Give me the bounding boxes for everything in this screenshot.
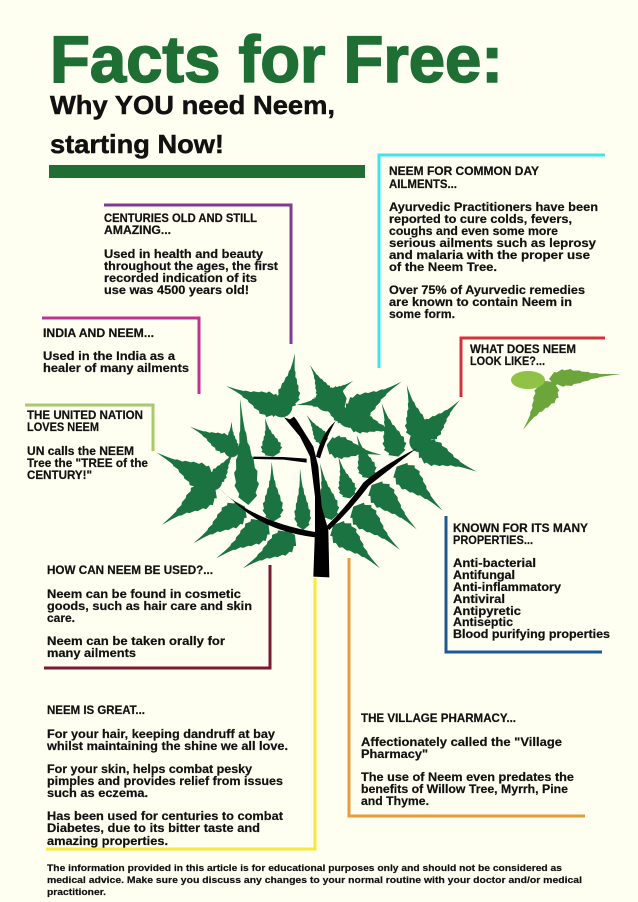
panel: India and Neem: INDIA AND NEEM... xyxy=(43,328,154,340)
panel: common day ailments xyxy=(379,155,605,368)
panel: how can neem be used: Neem can be taken orally for xyxy=(47,636,226,648)
subtitle xyxy=(50,90,335,159)
panel: centuries old: CENTURIES OLD AND STILL xyxy=(104,213,257,225)
panel: common day ailments: and malaria with the proper use xyxy=(389,250,590,262)
panel: known properties: Antiseptic xyxy=(453,617,514,629)
panel: neem is great: Diabetes, due to its bitter taste and xyxy=(47,823,260,835)
panel: how can neem be used: many ailments xyxy=(47,648,136,660)
panel: India and Neem: Used in the India as a xyxy=(43,351,176,363)
panel: neem is great: For your skin, helps combat pesky xyxy=(47,764,253,776)
panel: known properties: Blood purifying properties xyxy=(453,629,610,641)
panel: centuries old: Used in health and beauty xyxy=(104,249,264,261)
panel: known properties: Anti-inflammatory xyxy=(453,582,562,594)
panel: common day ailments: NEEM FOR COMMON DAY xyxy=(389,166,539,178)
panel: centuries old: use was 4500 years old! xyxy=(104,285,249,297)
panel: common day ailments: AILMENTS... xyxy=(389,179,457,191)
panel: known properties: PROPERTIES... xyxy=(453,535,533,547)
panel: how can neem be used: care. xyxy=(47,613,75,625)
panel: how can neem be used: HOW CAN NEEM BE USED?... xyxy=(47,565,213,577)
panel: United Nation: UN calls the NEEM xyxy=(27,446,134,458)
panel: known properties: Anti-bacterial xyxy=(453,558,536,570)
panel: common day ailments: Over 75% of Ayurvedic remedies xyxy=(389,285,585,297)
panel: village pharmacy: benefits of Willow Tree, Myrrh, Pine xyxy=(361,784,568,796)
panel: common day ailments: are known to contain Neem in xyxy=(389,297,572,309)
panel: village pharmacy: The use of Neem even predates the xyxy=(361,772,574,784)
panel: how can neem be used: Neem can be found in cosmetic xyxy=(47,589,242,601)
disclaimer: The information provided in this article is for educational purposes only and should not be considered as xyxy=(47,863,562,874)
panel: known properties: Antiviral xyxy=(453,594,505,606)
panel: village pharmacy: Pharmacy" xyxy=(361,749,428,761)
panel: neem is great: such as eczema. xyxy=(47,788,148,800)
panel: what does neem look like: WHAT DOES NEEM xyxy=(470,344,576,356)
subtitle: Why YOU need Neem, xyxy=(50,90,335,120)
panel: known properties: Antifungal xyxy=(453,570,515,582)
panel: how can neem be used: goods, such as hair care and skin xyxy=(47,601,252,613)
panel: village pharmacy: and Thyme. xyxy=(361,796,429,808)
panel: neem is great: amazing properties. xyxy=(47,836,168,848)
panel: centuries old: AMAZING... xyxy=(104,225,171,237)
panel: common day ailments: some form. xyxy=(389,309,455,321)
panel: village pharmacy: Affectionately called the "Village xyxy=(361,737,562,749)
disclaimer: practitioner. xyxy=(47,887,106,898)
panel: common day ailments: coughs and even some more xyxy=(389,226,558,238)
panel: common day ailments: reported to cure colds, fevers, xyxy=(389,214,572,226)
disclaimer xyxy=(47,863,582,898)
panel: United Nation: CENTURY!" xyxy=(27,470,92,482)
panel: India and Neem: healer of many ailments xyxy=(43,363,189,375)
title: Facts for Free: xyxy=(50,22,503,96)
panel: known properties: KNOWN FOR ITS MANY xyxy=(453,523,588,535)
panel: neem is great xyxy=(46,578,315,849)
panel: centuries old: throughout the ages, the first xyxy=(104,261,278,273)
panel: neem is great: For your hair, keeping dandruff at bay xyxy=(47,729,276,741)
panel: how can neem be used xyxy=(44,565,270,668)
panel: India and Neem xyxy=(42,318,199,394)
panel: neem is great: whilst maintaining the shine we all love. xyxy=(46,741,288,753)
panel: village pharmacy xyxy=(349,558,585,816)
panel: common day ailments: of the Neem Tree. xyxy=(389,262,497,274)
subtitle: starting Now! xyxy=(50,129,224,159)
panel: neem is great: pimples and provides relief from issues xyxy=(47,776,283,788)
green title bar xyxy=(49,165,365,178)
panel: common day ailments: Ayurvedic Practitioners have been xyxy=(389,202,598,214)
panel: neem is great: NEEM IS GREAT... xyxy=(47,705,145,717)
icon: neem leaves and fruit xyxy=(511,365,622,437)
panel: neem is great: Has been used for centuries to combat xyxy=(47,811,283,823)
panel: what does neem look like xyxy=(461,338,622,437)
panel: United Nation: Tree the "TREE of the xyxy=(27,458,148,470)
disclaimer: medical advice. Make sure you discuss any changes to your normal routine with your doctor and/or medical xyxy=(47,875,582,886)
neem tree illustration xyxy=(150,352,482,579)
panel: centuries old xyxy=(104,205,291,344)
panel: United Nation: THE UNITED NATION xyxy=(27,410,143,422)
tree foliage xyxy=(150,352,482,579)
panel: common day ailments: serious ailments such as leprosy xyxy=(389,238,597,250)
panel: known properties: Antipyretic xyxy=(453,606,522,618)
panel: what does neem look like: LOOK LIKE?... xyxy=(470,356,545,368)
panel: known properties xyxy=(446,516,610,652)
panel: village pharmacy: THE VILLAGE PHARMACY... xyxy=(361,713,516,725)
tree trunk and branches xyxy=(217,417,417,577)
panel: centuries old: recorded indication of its xyxy=(104,273,257,285)
panel: United Nation xyxy=(25,405,153,482)
panel: United Nation: LOVES NEEM xyxy=(27,422,99,434)
